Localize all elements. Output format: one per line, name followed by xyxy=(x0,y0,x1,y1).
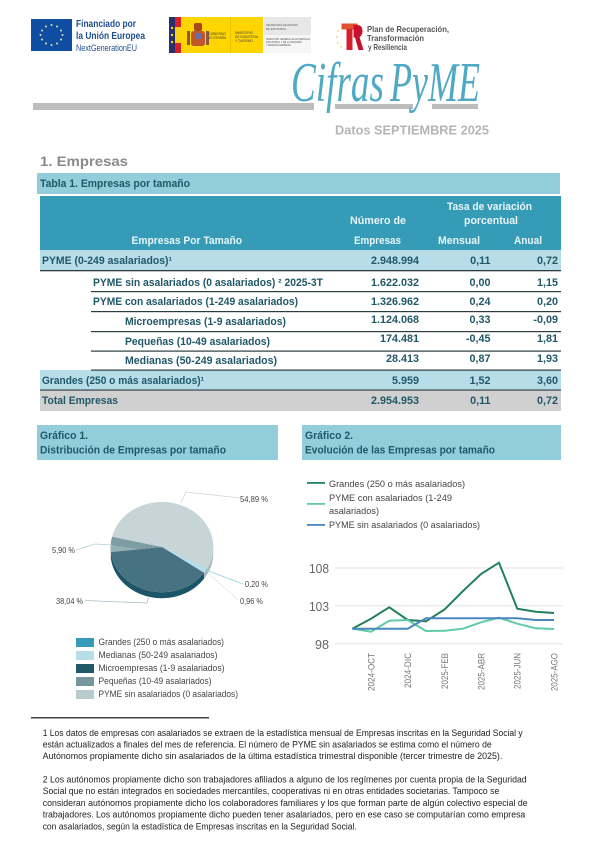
footnote 1: Autónomos propiamente dicho sin asalariados de la última estadística trimestral disponible (tercer trimestre de 2025). xyxy=(43,751,502,761)
pie legend: Medianas (50-249 asalariados) xyxy=(98,650,218,660)
line chart: evolution of companies: 103 xyxy=(309,599,329,614)
row: PYME: PYME (0-249 asalariados)¹ xyxy=(42,255,172,267)
row: PYME sin asalariados: PYME sin asalariados (0 asalariados) ² 2025-3T xyxy=(93,277,324,289)
pie legend: Microempresas (1-9 asalariados) xyxy=(98,663,225,673)
row: Microempresas: -0,09 xyxy=(533,314,558,326)
pie chart: distribution of companies: 0,96 % xyxy=(240,597,263,606)
footnote 1: están actualizados a finales del mes de referencia. El número de PYME sin asalariados se estima como el número de xyxy=(43,740,492,750)
logo: Gobierno de España, Ministerio de Industria y Turismo: INDUSTRIAL Y DE LA PEQUEÑA xyxy=(266,41,302,44)
title: Cifras PyME: Cifras xyxy=(291,52,384,114)
line chart legend: asalariados) xyxy=(329,506,379,516)
chart 2 heading: Gráfico 2. xyxy=(305,430,353,442)
row: PYME: 0,72 xyxy=(537,255,558,267)
logo: Gobierno de España, Ministerio de Industria y Turismo xyxy=(169,17,311,53)
row: PYME con asalariados: 0,24 xyxy=(469,296,490,308)
row: Medianas xyxy=(125,353,558,367)
chart 1 heading: Distribución de Empresas por tamaño xyxy=(40,444,227,456)
row: Total: 0,11 xyxy=(470,395,490,407)
pie chart: distribution of companies: 0,20 % xyxy=(245,580,268,589)
logo: Plan de Recuperación, Transformación y Resiliencia xyxy=(336,24,449,52)
row: PYME: 0,11 xyxy=(470,255,490,267)
chart 2 heading: Evolución de las Empresas por tamaño xyxy=(305,444,496,456)
table header: Anual xyxy=(514,235,542,247)
chart 1 heading xyxy=(37,425,278,460)
table header: Mensual xyxy=(438,235,480,247)
logo: Financiado por la Unión Europea: Financiado por xyxy=(76,19,136,30)
logo: Financiado por la Unión Europea xyxy=(31,19,145,54)
footnote 2 xyxy=(43,774,528,832)
logo: Plan de Recuperación, Transformación y Resiliencia: Plan de Recuperación, xyxy=(367,24,449,34)
logo: Plan de Recuperación, Transformación y Resiliencia: Transformación xyxy=(367,33,424,43)
row: Medianas: 0,87 xyxy=(469,353,490,365)
series: Grandes xyxy=(352,563,554,629)
footnote 1: 1 Los datos de empresas con asalariados se extraen de la estadística mensual de Empresas inscritas en la Seguridad Social y xyxy=(43,728,523,738)
row: Pequeñas xyxy=(125,333,558,348)
x axis labels: 2025-AGO xyxy=(550,653,560,691)
row: PYME sin asalariados xyxy=(93,277,558,289)
pie chart: distribution of companies: 54,89 % xyxy=(240,495,268,504)
line chart: evolution of companies xyxy=(309,561,563,691)
row: Pequeñas: 174.481 xyxy=(380,333,419,345)
line chart legend: Grandes (250 o más asalariados) xyxy=(329,479,465,489)
row: PYME con asalariados: 0,20 xyxy=(537,296,558,308)
row: Microempresas xyxy=(125,314,558,328)
x axis labels: 2025-ABR xyxy=(476,653,488,690)
x axis labels: 2025-JUN xyxy=(512,653,524,689)
footnote 1 xyxy=(43,728,523,761)
row: Total: 2.954.953 xyxy=(371,395,419,407)
row: Grandes: 5.959 xyxy=(392,375,419,387)
logo: Gobierno de España, Ministerio de Industria y Turismo: Y TURISMO xyxy=(235,39,254,43)
logo: Financiado por la Unión Europea: NextGenerationEU xyxy=(76,43,137,54)
logo: Gobierno de España, Ministerio de Industria y Turismo: Y MEDIANA EMPRESA xyxy=(266,44,291,47)
row: PYME con asalariados: PYME con asalariados (1-249 asalariados) xyxy=(93,296,298,308)
x axis labels xyxy=(366,653,560,691)
logo: Gobierno de España, Ministerio de Industria y Turismo: SECRETARÍA DE ESTADO xyxy=(266,23,299,27)
row: Microempresas: Microempresas (1-9 asalariados) xyxy=(125,316,286,328)
x axis labels: 2024-DIC xyxy=(403,653,414,688)
subtitle: date: Datos SEPTIEMBRE 2025 xyxy=(335,124,489,138)
table header xyxy=(40,196,561,250)
line chart: evolution of companies: 108 xyxy=(309,561,329,576)
row: Grandes: 3,60 xyxy=(537,375,558,387)
pie legend: Pequeñas (10-49 asalariados) xyxy=(98,676,212,686)
row: Medianas: 1,93 xyxy=(537,353,558,365)
x axis labels: 2024-OCT xyxy=(366,653,378,691)
section heading: 1. Empresas xyxy=(40,154,128,169)
footnote 2: consideran autónomos propiamente dicho los colaboradores familiares y los que forman parte de algún colectivo especial de xyxy=(43,798,528,808)
footnote separator xyxy=(31,717,209,718)
row: Pequeñas: 1,81 xyxy=(537,333,558,345)
line chart legend: PYME con asalariados (1-249 xyxy=(329,493,452,503)
logo: Gobierno de España, Ministerio de Industria y Turismo: GOBIERNO xyxy=(208,32,227,36)
row: PYME sin asalariados: 1.622.032 xyxy=(371,277,419,289)
logo: Gobierno de España, Ministerio de Industria y Turismo: MINISTERIO xyxy=(235,31,253,35)
row: PYME: 2.948.994 xyxy=(371,255,419,267)
logo: Gobierno de España, Ministerio de Industria y Turismo: DIRECCIÓN GENERAL DE ESTRATEGIA xyxy=(266,38,310,41)
chart 2 heading xyxy=(302,425,561,460)
row: Grandes: Grandes (250 o más asalariados)¹ xyxy=(42,375,204,387)
row: Grandes xyxy=(40,370,561,390)
pie legend: Grandes (250 o más asalariados) xyxy=(98,637,224,647)
row: PYME sin asalariados: 1,15 xyxy=(537,277,558,289)
pie chart: distribution of companies: 38,04 % xyxy=(56,597,83,606)
footnote 2: 2 Los autónomos propiamente dicho son trabajadores afiliados a alguno de los regímenes por cuenta propia de la Seguridad xyxy=(43,774,527,784)
line chart legend: PYME sin asalariados (0 asalariados) xyxy=(329,520,480,530)
row: PYME sin asalariados: 0,00 xyxy=(469,277,490,289)
row: Microempresas: 1.124.068 xyxy=(371,314,419,326)
row: Microempresas: 0,33 xyxy=(469,314,490,326)
footnote 2: Social que no están integrados en sociedades mercantiles, cooperativas ni en otras entidades societarias. Tampoco se xyxy=(43,786,499,796)
table header: porcentual xyxy=(464,215,518,227)
row: Total: 0,72 xyxy=(537,395,558,407)
pie leader lines xyxy=(76,492,243,603)
table header: Tasa de variación xyxy=(447,201,532,213)
chart 1 heading: Gráfico 1. xyxy=(40,430,88,442)
table title bar: Tabla 1. Empresas por tamaño xyxy=(40,178,191,190)
table header: Empresas xyxy=(354,235,401,247)
title: Cifras PyME: PyME xyxy=(389,52,480,114)
pie legend xyxy=(76,637,238,699)
row: Pequeñas: Pequeñas (10-49 asalariados) xyxy=(125,336,270,348)
x axis labels: 2025-FEB xyxy=(440,653,451,689)
row: Total: Total Empresas xyxy=(42,395,118,407)
row: Pequeñas: -0,45 xyxy=(466,333,490,345)
table title bar xyxy=(37,173,560,194)
row: Medianas: 28.413 xyxy=(386,353,419,365)
logo: Financiado por la Unión Europea: la Unión Europea xyxy=(76,31,145,42)
logo: Gobierno de España, Ministerio de Industria y Turismo: DE ESPAÑA xyxy=(208,35,227,40)
row: PYME xyxy=(40,250,561,270)
table 1: companies by size xyxy=(40,196,561,411)
footnote 2: trabajadores. Los autónomos propiamente dicho pueden tener asalariados, pero en ese caso se computarían como empresa xyxy=(43,810,525,820)
line chart: evolution of companies: 98 xyxy=(315,637,329,652)
pie chart: distribution of companies: 5,90 % xyxy=(52,546,75,555)
logo: Gobierno de España, Ministerio de Industria y Turismo: DE INDUSTRIA xyxy=(235,35,259,39)
pie legend: PYME sin asalariados (0 asalariados) xyxy=(98,689,238,699)
table header: Empresas Por Tamaño xyxy=(132,235,243,247)
decorative header bars xyxy=(33,103,478,110)
line chart legend xyxy=(307,479,480,530)
row: PYME con asalariados: 1.326.962 xyxy=(371,296,419,308)
row: Medianas: Medianas (50-249 asalariados) xyxy=(125,355,277,367)
series: PYME sin asalariados xyxy=(352,618,554,629)
table header: Número de xyxy=(350,215,406,227)
series: PYME con asalariados xyxy=(352,618,554,632)
footnote 2: con asalariados, según la estadística de Empresas inscritas en la Seguridad Social. xyxy=(43,822,357,832)
row: Total xyxy=(40,391,561,411)
row: PYME con asalariados xyxy=(93,296,558,308)
logo: Plan de Recuperación, Transformación y Resiliencia: y Resiliencia xyxy=(368,42,407,52)
row: Grandes: 1,52 xyxy=(469,375,490,387)
pie chart: distribution of companies xyxy=(52,492,268,606)
logo: Gobierno de España, Ministerio de Industria y Turismo: DE INDUSTRIA xyxy=(266,27,286,31)
